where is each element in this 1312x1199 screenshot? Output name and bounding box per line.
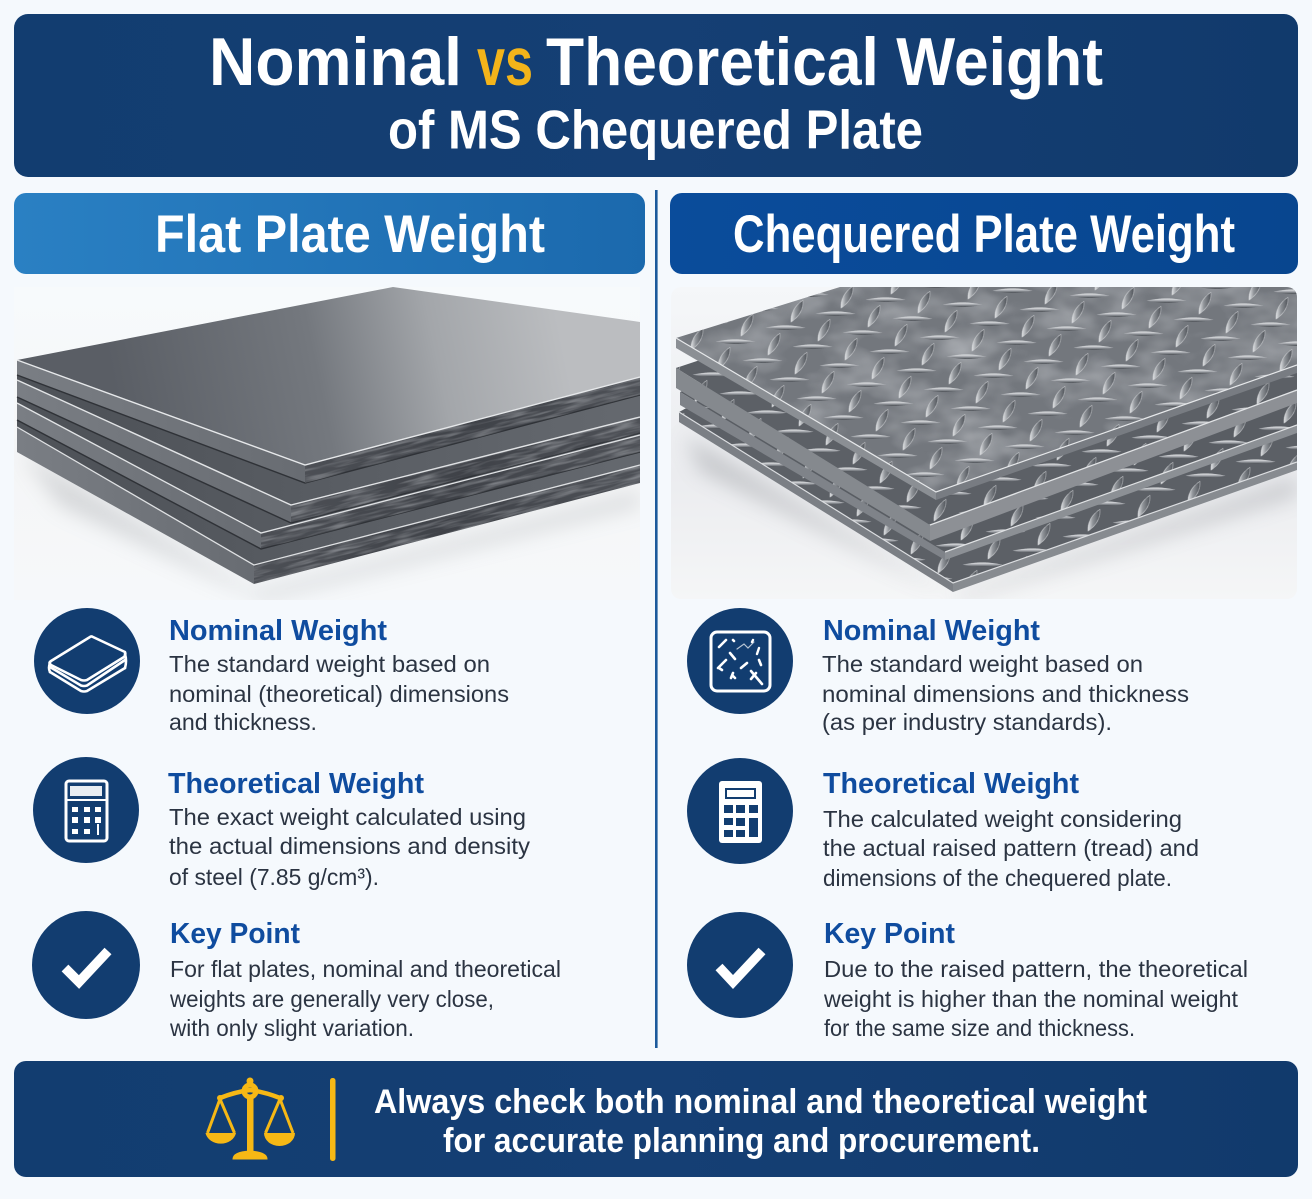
description [169, 651, 509, 735]
left column: theoretical weight [33, 757, 530, 890]
description [822, 651, 1189, 735]
right column: nominal weight [687, 608, 1189, 735]
description: Due to the raised pattern, the theoretical [824, 956, 1248, 982]
description: dimensions of the chequered plate. [823, 865, 1172, 891]
left column: key point [32, 911, 561, 1041]
description: The standard weight based on [169, 651, 490, 677]
description [823, 806, 1199, 891]
left column: nominal weight: Nominal Weight [169, 615, 387, 647]
heading: flat plate weight: Flat Plate Weight [155, 205, 545, 264]
image: stack of flat steel plates [16, 287, 640, 600]
description: weights are generally very close, [169, 986, 494, 1012]
left column: key point: Key Point [170, 918, 300, 950]
description [169, 956, 561, 1041]
column divider [655, 190, 658, 1048]
description: for the same size and thickness. [824, 1015, 1135, 1041]
footer banner [14, 1061, 1298, 1177]
icon: calculator [687, 758, 793, 864]
heading: flat plate weight [14, 193, 645, 274]
description: The exact weight calculated using [169, 804, 526, 830]
footer message: for accurate planning and procurement. [443, 1122, 1040, 1160]
heading: chequered plate weight [670, 193, 1298, 274]
icon: check mark [32, 911, 140, 1019]
description: nominal (theoretical) dimensions [169, 681, 509, 707]
title banner [14, 14, 1298, 177]
right column: theoretical weight [687, 758, 1199, 891]
footer message [374, 1083, 1147, 1160]
title line 1: vs [477, 24, 533, 100]
description: For flat plates, nominal and theoretical [170, 956, 561, 982]
icon: check mark [687, 912, 793, 1018]
footer message: Always check both nominal and theoretical weight [374, 1083, 1147, 1121]
description: with only slight variation. [169, 1015, 414, 1041]
description: and thickness. [169, 709, 317, 735]
description: The calculated weight considering [823, 806, 1182, 832]
description: the actual raised pattern (tread) and [823, 835, 1199, 861]
right column: theoretical weight: Theoretical Weight [823, 768, 1079, 800]
title line 1: Theoretical Weight [546, 24, 1103, 100]
left column: nominal weight [34, 608, 509, 735]
description: weight is higher than the nominal weight [823, 986, 1238, 1012]
title line 1 [209, 24, 1103, 100]
title line 2: of MS Chequered Plate [388, 98, 923, 160]
icon: chequered plate [687, 608, 793, 714]
description: of steel (7.85 g/cm³). [169, 864, 379, 890]
description: The standard weight based on [822, 651, 1143, 677]
title line 1: Nominal [209, 24, 462, 100]
right column: nominal weight: Nominal Weight [823, 615, 1040, 647]
icon: balance scale [206, 1078, 295, 1159]
description: the actual dimensions and density [169, 833, 530, 859]
description: nominal dimensions and thickness [822, 681, 1189, 707]
left column: theoretical weight: Theoretical Weight [168, 768, 424, 800]
right column: key point: Key Point [824, 918, 955, 950]
image: stack of chequered plates [671, 287, 1297, 600]
accent bar [330, 1078, 336, 1161]
right column: key point [687, 912, 1248, 1041]
icon: calculator [33, 757, 139, 863]
description: (as per industry standards). [822, 709, 1112, 735]
icon: stacked plates [34, 608, 140, 714]
description [823, 956, 1248, 1041]
description [169, 804, 530, 890]
